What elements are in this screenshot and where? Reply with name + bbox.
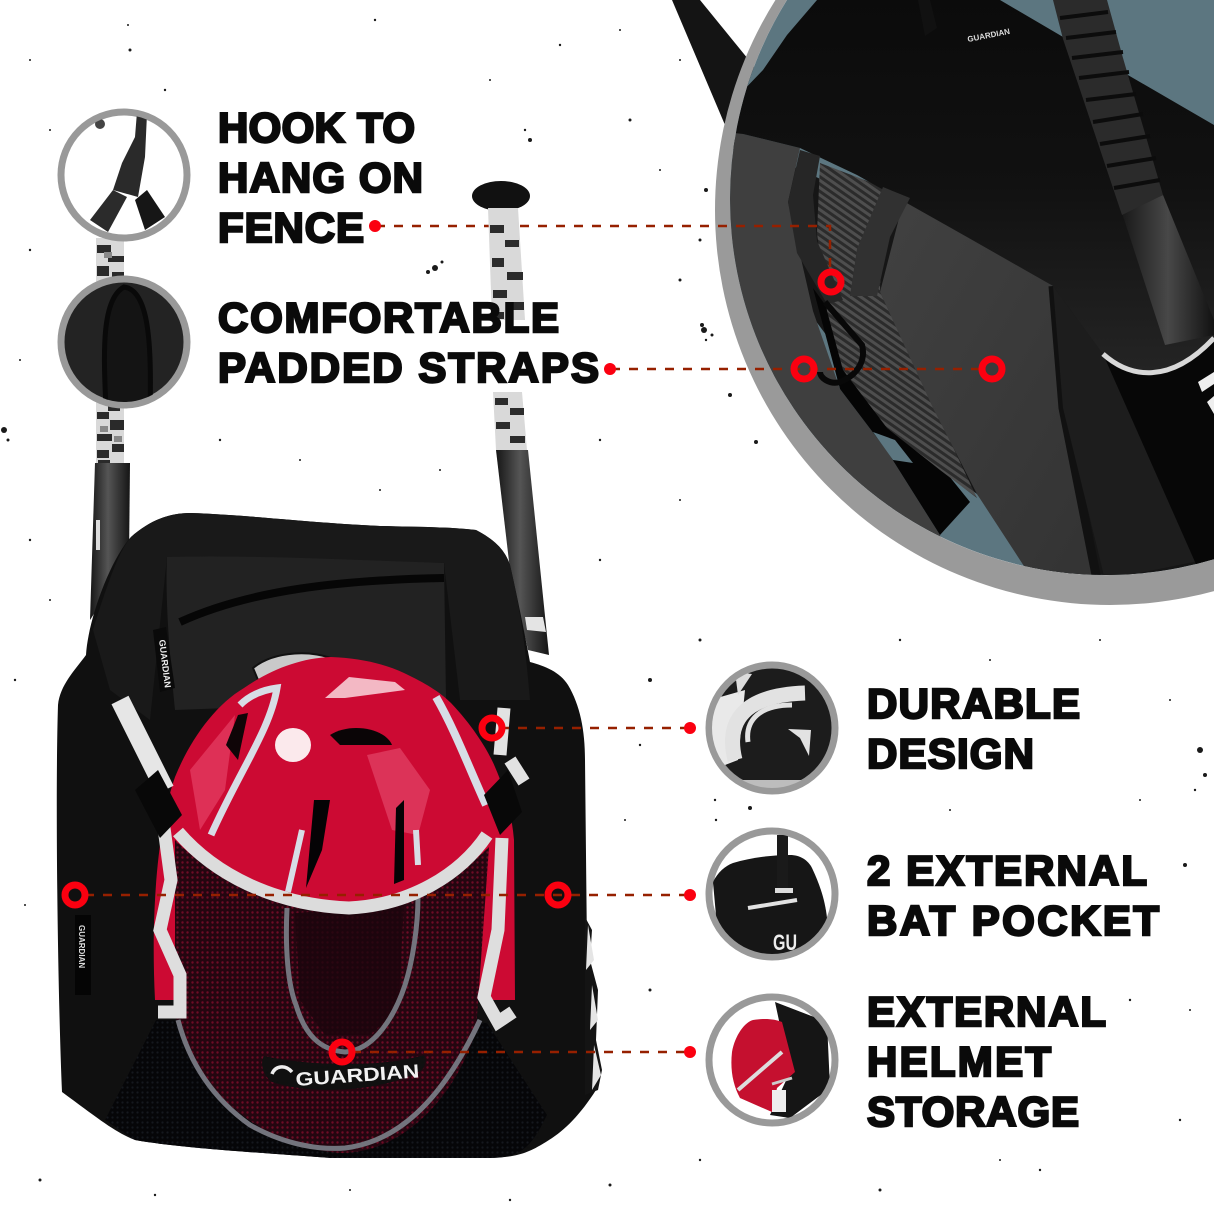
dark mesh panel: [1053, 286, 1136, 575]
bat right: [472, 181, 549, 655]
helmet shell behind: [253, 653, 335, 690]
dashed leader lines top: [376, 226, 985, 369]
heading: hook to hang on fence: FENCE: [218, 204, 364, 251]
heading: 2 external bat pocket: [867, 847, 1159, 944]
top flap shading: [93, 513, 530, 720]
side zipper tag: [75, 915, 91, 995]
icon: padded straps: [61, 279, 187, 410]
side zipper tag: GUARDIAN: [77, 925, 86, 968]
buckle right: [484, 770, 522, 835]
backpack: [57, 513, 602, 1158]
heading: durable design: DESIGN: [867, 730, 1034, 777]
brand tag: [153, 627, 175, 692]
side cord: [158, 828, 513, 1022]
bat knob: [472, 181, 530, 211]
detail panel: zoomed back of bag with hook: GUARDIAN: [967, 27, 1011, 44]
marker dots: [65, 220, 1002, 1062]
elastic strap left: [120, 700, 165, 790]
icon: helmet storage: [709, 997, 835, 1123]
panel seam: [1053, 286, 1097, 580]
icon: hook: [61, 112, 187, 238]
mesh inner shadow: [295, 905, 404, 1035]
front pocket: [167, 557, 446, 710]
side lettering: [585, 917, 602, 1095]
mesh strap: [817, 163, 977, 498]
helmet vent slivers: [306, 800, 330, 888]
helmet: [154, 657, 515, 1000]
dark gap under padding: [813, 288, 970, 535]
top flap: [725, 0, 1214, 373]
helmet badge: GUARDIAN: [295, 1061, 420, 1091]
bat outside detail panel: [672, 0, 757, 125]
heading: external helmet storage: [867, 988, 1106, 1135]
heading: hook to hang on fence: [218, 104, 423, 251]
bag silhouette: [57, 513, 596, 1158]
elastic strap right: [500, 708, 524, 782]
black pocket: [1106, 342, 1214, 564]
leader lines lower: [85, 728, 690, 1052]
heading: hook to hang on fence: HANG ON: [218, 154, 423, 201]
buckle left: [135, 770, 182, 838]
panel ring: [715, 0, 1214, 605]
right hook strap: [850, 187, 910, 296]
icon: bat pocket: [709, 831, 835, 960]
bottom black mesh: [105, 1020, 547, 1158]
helmet stripes: [211, 688, 277, 835]
heading: comfortable padded straps: PADDED STRAPS: [218, 344, 599, 391]
mesh stripes: [178, 897, 480, 1148]
zoomed bat grip: [1053, 0, 1163, 215]
left hook strap: [788, 150, 843, 304]
heading: comfortable padded straps: [218, 294, 599, 391]
zoomed bat barrel: [1122, 195, 1214, 345]
helmet top vent: [330, 728, 392, 745]
icon: bat pocket: GU: [773, 930, 797, 955]
brand tag: GUARDIAN: [157, 639, 173, 688]
icon: durable design: [709, 665, 835, 792]
mesh rim: [178, 832, 487, 908]
heading: durable design: [867, 680, 1080, 777]
heading: hook to hang on fence: HOOK TO: [218, 104, 415, 151]
left grey padding: [730, 133, 940, 536]
heading: 2 external bat pocket: 2 EXTERNAL: [867, 847, 1147, 894]
heading: external helmet storage: STORAGE: [867, 1088, 1079, 1135]
helmet highlights: [367, 748, 430, 835]
heading: comfortable padded straps: COMFORTABLE: [218, 294, 559, 341]
helmet badge: [262, 1055, 426, 1091]
heading: 2 external bat pocket: BAT POCKET: [867, 897, 1159, 944]
bat pocket piping: [1103, 338, 1214, 373]
pocket zipper: [180, 578, 444, 622]
mesh over helmet: [175, 840, 489, 1153]
panel backdrop: [700, 0, 1214, 600]
carabiner hook: [820, 302, 863, 383]
bat left: [90, 238, 130, 620]
heading: external helmet storage: EXTERNAL: [867, 988, 1106, 1035]
pocket letter: [1198, 372, 1214, 414]
dark base under padding: [727, 136, 1214, 580]
heading: external helmet storage: HELMET: [867, 1038, 1051, 1085]
zipper tag and brand: [918, 0, 937, 36]
heading: durable design: DURABLE: [867, 680, 1080, 727]
detail panel: zoomed back of bag with hook: [700, 0, 1214, 605]
grey back panel: [880, 195, 1097, 580]
